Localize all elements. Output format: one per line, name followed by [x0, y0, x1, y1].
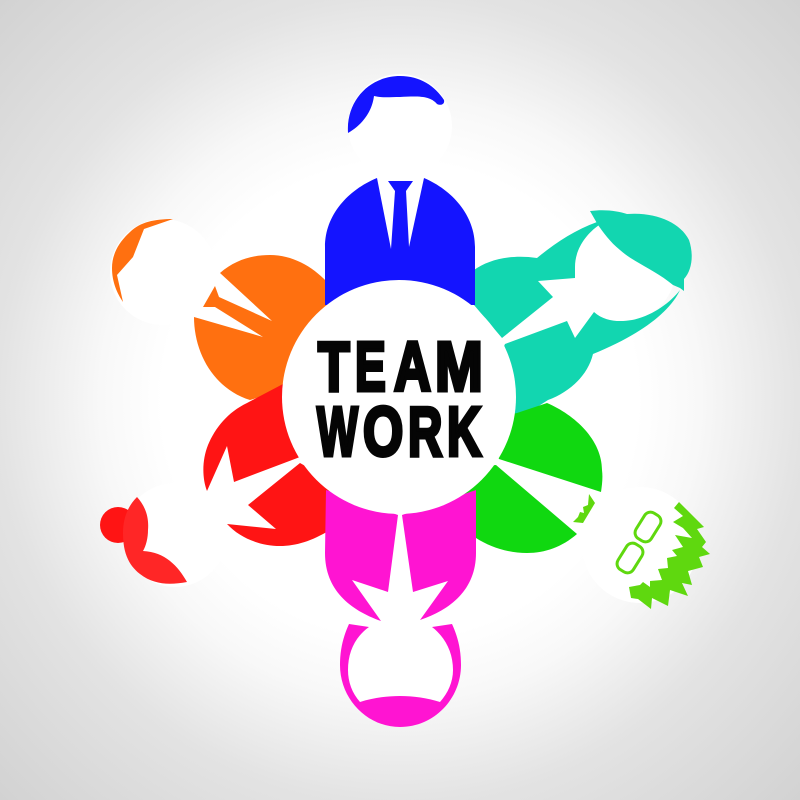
- title: TEAM WORK: E: [355, 327, 386, 406]
- title: TEAM WORK: T: [318, 328, 350, 406]
- orange hair: [112, 219, 173, 302]
- teal body upper: [474, 222, 599, 338]
- blue hair: [348, 76, 444, 133]
- pink body left: [325, 490, 398, 621]
- title: TEAM WORK: O: [363, 393, 403, 471]
- title: TEAM WORK: A: [394, 328, 431, 405]
- orange body: [194, 255, 327, 400]
- person: green: [440, 403, 710, 609]
- white heads: [110, 74, 698, 722]
- title: TEAM WORK: M: [435, 327, 483, 406]
- green collar: [573, 494, 595, 523]
- green body lower: [440, 465, 577, 553]
- pink body right: [402, 490, 476, 620]
- red body upper: [203, 384, 300, 491]
- green beard: [629, 502, 710, 609]
- pink head ring: [340, 624, 461, 727]
- person: pink: [325, 490, 476, 727]
- person: teal: [474, 210, 692, 420]
- red body lower: [227, 463, 330, 546]
- green body upper: [480, 403, 602, 492]
- title: TEAM WORK: R: [408, 392, 442, 471]
- title: TEAM WORK: [317, 327, 483, 471]
- title: TEAM WORK: W: [317, 393, 358, 471]
- person: blue: [325, 76, 475, 305]
- center circle: [282, 280, 516, 514]
- title: TEAM WORK: K: [447, 392, 481, 471]
- person: red: [100, 384, 330, 584]
- green glasses: [614, 510, 664, 575]
- blue suit and tie: [325, 178, 475, 305]
- red hair bun: [100, 507, 136, 543]
- teal hair: [590, 210, 692, 291]
- person: orange: [112, 219, 327, 400]
- teal body lower: [480, 290, 680, 420]
- red hair: [123, 497, 187, 584]
